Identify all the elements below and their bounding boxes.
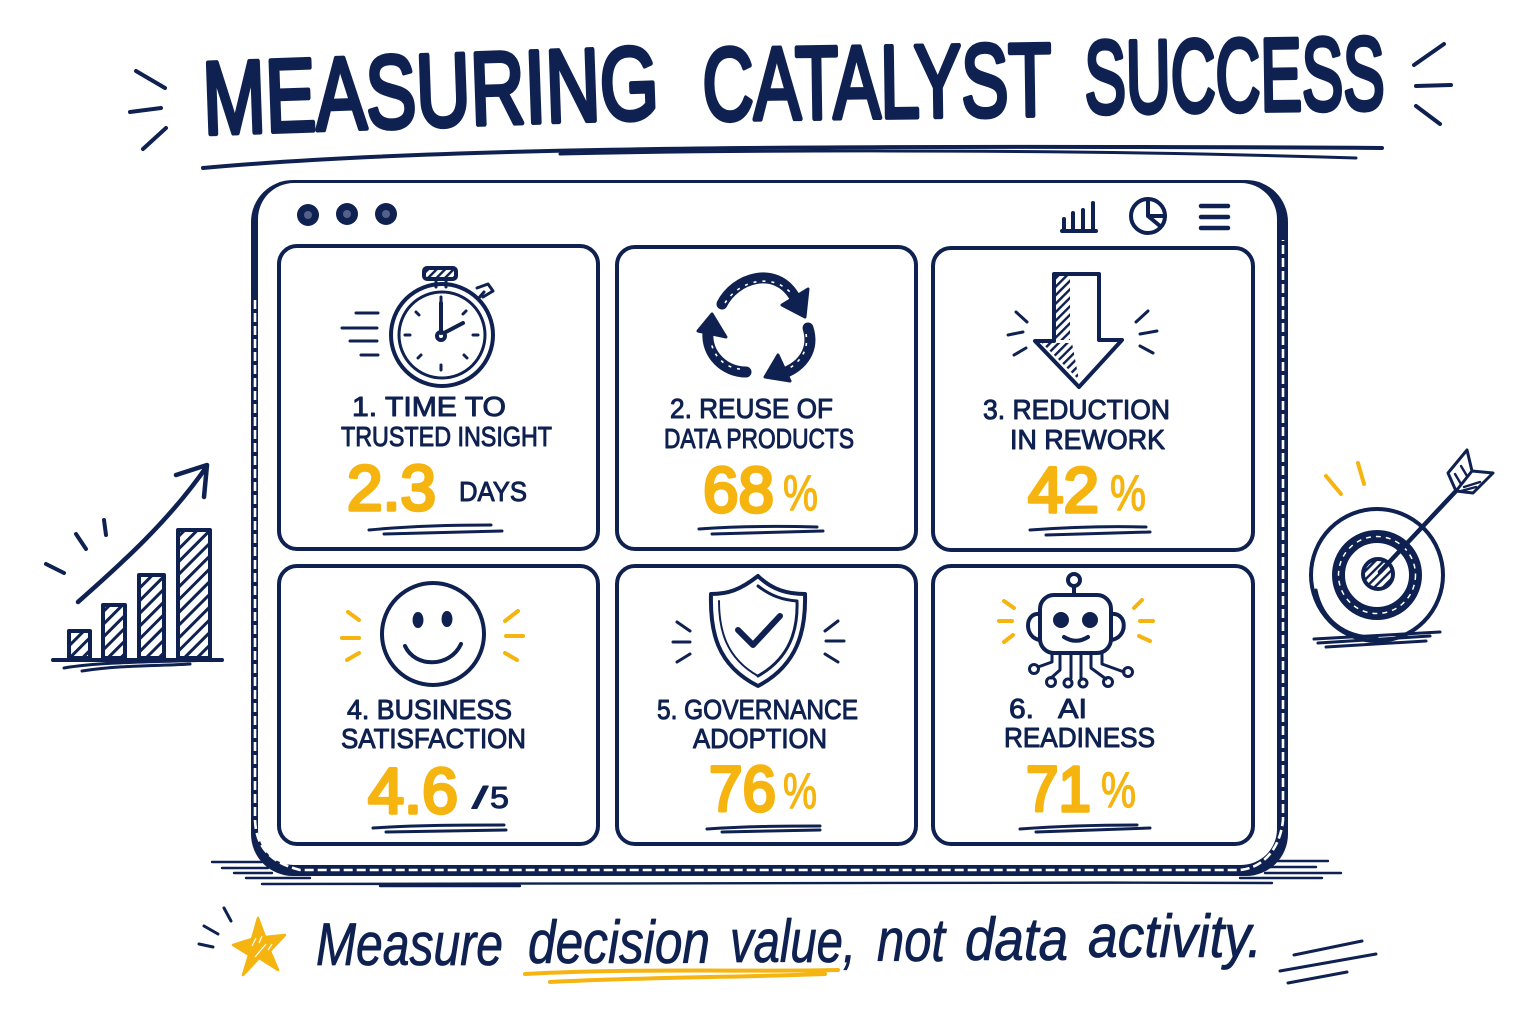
- panel: governance adoption: %: [783, 763, 817, 819]
- panel: time to trusted insight: TRUSTED INSIGHT: [341, 421, 552, 452]
- bars: [69, 530, 210, 658]
- panel: AI readiness: AI: [1058, 693, 1087, 724]
- title: MEASURING: [201, 25, 660, 156]
- value: 68: [703, 454, 774, 526]
- icon burst: [1008, 311, 1157, 355]
- panel: reuse of data products: DATA PRODUCTS: [664, 423, 854, 454]
- label: 1. TIME TO: [352, 391, 506, 422]
- icon: down arrow: [1035, 274, 1122, 387]
- panel: business satisfaction: 5: [490, 780, 509, 815]
- ground: [1314, 632, 1440, 647]
- underline: [1030, 527, 1150, 535]
- panel: governance adoption: [617, 566, 916, 844]
- icon: stopwatch: [342, 268, 493, 386]
- label: 5. GOVERNANCE: [657, 694, 858, 725]
- panel: AI readiness: [933, 566, 1253, 844]
- value: 2.3: [347, 452, 436, 524]
- panel: reduction in rework: IN REWORK: [1010, 424, 1165, 455]
- icon burst: [342, 611, 523, 660]
- footer tagline: activity.: [1088, 903, 1262, 970]
- title underline: [203, 147, 1382, 176]
- panel: reuse of data products: %: [783, 465, 818, 521]
- panel: business satisfaction: SATISFACTION: [341, 723, 526, 754]
- panel: time to trusted insight: [279, 246, 598, 549]
- panel: business satisfaction: [279, 566, 598, 844]
- window dots: [297, 203, 397, 226]
- label: 3. REDUCTION: [983, 394, 1170, 425]
- dashboard window: [251, 180, 1288, 876]
- toolbar icon: bars: [1062, 203, 1096, 231]
- value: 42: [1028, 454, 1099, 526]
- footer tagline: not: [877, 907, 947, 974]
- icon burst: [999, 600, 1153, 642]
- burst: [1326, 463, 1364, 494]
- underline: [699, 526, 823, 534]
- baseline: [53, 660, 222, 671]
- highlight underline: [525, 970, 838, 982]
- arrow: [1380, 450, 1493, 572]
- panel: governance adoption: ADOPTION: [693, 723, 827, 754]
- panel: reduction in rework: [933, 248, 1253, 550]
- title: CATALYST: [702, 22, 1052, 142]
- burst: [46, 520, 106, 573]
- underline: [707, 826, 820, 832]
- target with arrow: [1311, 450, 1493, 647]
- toolbar icon: menu: [1201, 206, 1228, 228]
- title burst right: [1414, 44, 1451, 124]
- footer star: [199, 908, 285, 975]
- toolbar icon: pie: [1131, 199, 1165, 233]
- growth arrow: [78, 465, 207, 602]
- title burst left: [130, 71, 166, 149]
- icon: shield: [711, 576, 805, 686]
- footer tagline: value,: [730, 908, 856, 975]
- footer tagline: Measure: [316, 911, 503, 978]
- label: 2. REUSE OF: [670, 393, 833, 424]
- value: 4.6: [368, 755, 458, 827]
- underline: [373, 825, 506, 832]
- icon: robot: [1028, 574, 1132, 687]
- footer tagline: decision: [528, 909, 710, 976]
- icon burst: [673, 621, 844, 662]
- panel: time to trusted insight: DAYS: [459, 476, 527, 507]
- icon: smiley: [382, 583, 484, 685]
- footer lines: [1280, 941, 1376, 983]
- value: 71: [1026, 753, 1091, 825]
- star burst: [199, 908, 231, 947]
- footer tagline: [316, 903, 1262, 982]
- target: [1311, 509, 1443, 641]
- underline: [1020, 825, 1150, 832]
- title: [201, 16, 1385, 156]
- value: 76: [709, 753, 776, 825]
- panel: business satisfaction: /: [472, 780, 489, 815]
- panel: reduction in rework: %: [1110, 465, 1146, 521]
- ground lines under window: [212, 861, 1341, 886]
- underline: [369, 525, 502, 534]
- panel: AI readiness: %: [1101, 762, 1136, 818]
- label: 6.: [1009, 693, 1034, 724]
- panel: reuse of data products: [617, 247, 916, 549]
- label: 4. BUSINESS: [347, 694, 512, 725]
- icon: recycle arrows: [698, 278, 810, 381]
- footer tagline: data: [965, 906, 1068, 973]
- panel: AI readiness: READINESS: [1004, 722, 1155, 753]
- growth chart: [46, 465, 222, 671]
